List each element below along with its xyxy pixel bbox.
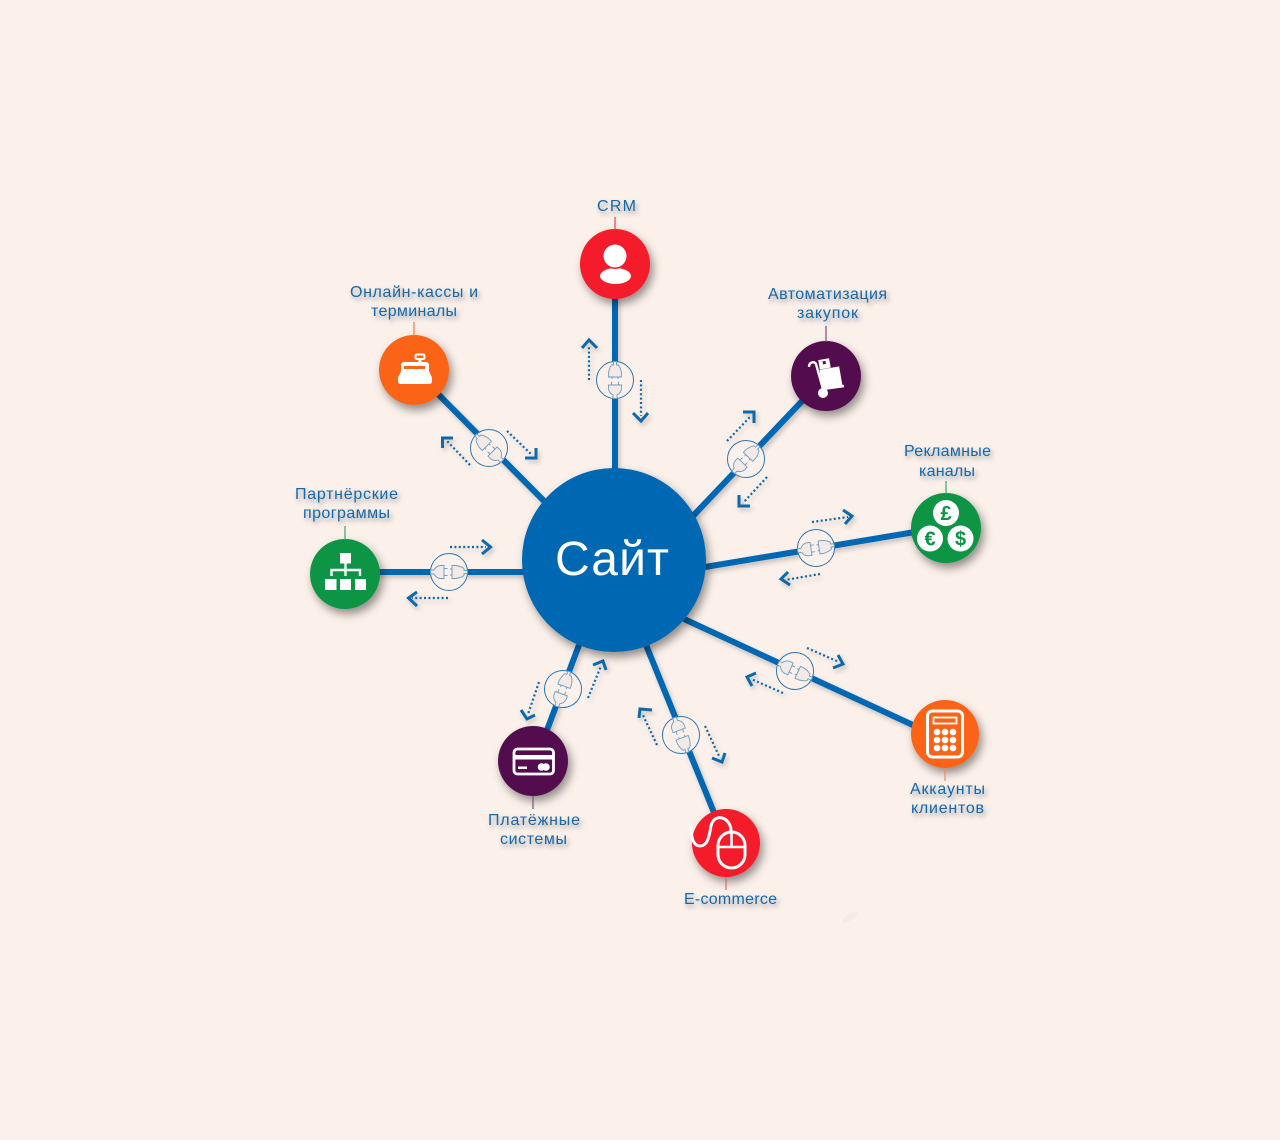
hub circle	[522, 468, 706, 652]
spoke: payment systems	[488, 645, 606, 848]
connecting line: automation	[693, 398, 805, 516]
label: automation: Автоматизация	[768, 286, 887, 303]
node: automation	[791, 341, 861, 411]
label: advertising: каналы	[919, 463, 975, 480]
arrow down: CRM	[633, 380, 648, 421]
arrow right: partners	[450, 540, 490, 554]
node: accounts	[911, 700, 979, 768]
label: advertising	[904, 443, 991, 480]
connecting line: payments	[547, 645, 579, 730]
icon: currency coins: $	[955, 528, 966, 550]
node: payments	[498, 726, 568, 796]
spoke: CRM	[580, 198, 650, 472]
arrow left: partners	[408, 592, 448, 606]
spoke: advertising channels	[705, 443, 991, 585]
arrow out: advertising	[812, 510, 852, 524]
plug connector: accounts	[770, 646, 820, 696]
plug connector: automation	[720, 433, 772, 485]
leader: cash registers	[413, 322, 415, 336]
spoke: online cash registers	[350, 284, 546, 503]
label: CRM: CRM	[597, 198, 636, 215]
arrow up: payments	[588, 661, 606, 698]
node: partners	[310, 539, 380, 609]
label: payments: системы	[500, 831, 567, 848]
leader: partners	[344, 526, 346, 540]
connecting line: partners	[376, 569, 526, 575]
node: CRM	[580, 229, 650, 299]
label: accounts: Аккаунты	[910, 781, 985, 798]
label: payments	[488, 812, 580, 848]
arrow in: cash registers	[507, 431, 536, 458]
node: e-commerce	[692, 809, 760, 877]
leader: accounts	[944, 768, 946, 781]
label: accounts	[910, 781, 985, 817]
icon: currency coins: €	[924, 528, 936, 550]
icon: currency coins	[917, 500, 974, 552]
icon: currency coins: £	[940, 503, 952, 525]
faint smudge	[841, 909, 859, 925]
icon: calculator	[928, 711, 962, 757]
arrow in: automation	[739, 477, 767, 506]
label: accounts: клиентов	[911, 800, 984, 817]
label: cash registers	[350, 284, 478, 320]
icon: bank card	[514, 749, 554, 774]
icon: org chart	[325, 553, 366, 590]
plug connector: e-commerce	[657, 711, 705, 759]
node: advertising	[911, 493, 981, 563]
plug connector: advertising	[795, 527, 837, 569]
label: e-commerce: E-commerce	[684, 891, 777, 908]
leader: advertising	[945, 481, 947, 494]
arrow out: accounts	[807, 648, 843, 668]
label: automation	[768, 286, 887, 322]
arrow out: cash registers	[442, 438, 470, 465]
hub title: Сайт	[555, 533, 669, 586]
spoke: client accounts	[684, 619, 985, 817]
label: partners	[295, 486, 398, 522]
leader: payments	[532, 796, 534, 809]
label: cash registers: терминалы	[371, 303, 457, 320]
connecting line: accounts	[684, 619, 915, 726]
plug connector: partners	[430, 554, 468, 590]
connecting line: e-commerce	[646, 645, 715, 815]
label: payments: Платёжные	[488, 812, 580, 829]
icon: person	[600, 243, 631, 284]
arrow out: e-commerce	[705, 726, 725, 762]
spoke: partner programs	[295, 486, 526, 609]
icon: mouse	[691, 818, 745, 868]
arrow out: automation	[727, 412, 754, 441]
leader: CRM	[614, 217, 616, 230]
arrow down: payments	[521, 682, 539, 719]
plug connector: payments	[539, 665, 587, 713]
label: partners: программы	[303, 505, 390, 522]
connecting line: cash registers	[436, 392, 546, 503]
spoke: purchase automation	[693, 286, 887, 516]
icon: hand truck	[809, 358, 844, 398]
connecting line: advertising	[705, 532, 915, 567]
central hub	[522, 468, 706, 652]
arrow in: advertising	[781, 572, 820, 585]
spoke: e-commerce	[639, 645, 777, 908]
arrow in: accounts	[747, 673, 783, 693]
label: advertising: Рекламные	[904, 443, 991, 460]
node: cash registers	[379, 335, 449, 405]
label: cash registers: Онлайн-кассы и	[350, 284, 478, 301]
leader: automation	[825, 326, 827, 342]
icon: cash register	[398, 354, 432, 384]
plug connector: cash registers	[463, 422, 515, 474]
arrow up: CRM	[582, 340, 597, 380]
arrow in: e-commerce	[639, 709, 657, 745]
label: automation: закупок	[797, 305, 859, 322]
label: partners: Партнёрские	[295, 486, 398, 503]
connecting line: CRM	[612, 295, 618, 472]
plug connector: CRM	[596, 362, 634, 398]
leader: e-commerce	[725, 878, 727, 890]
